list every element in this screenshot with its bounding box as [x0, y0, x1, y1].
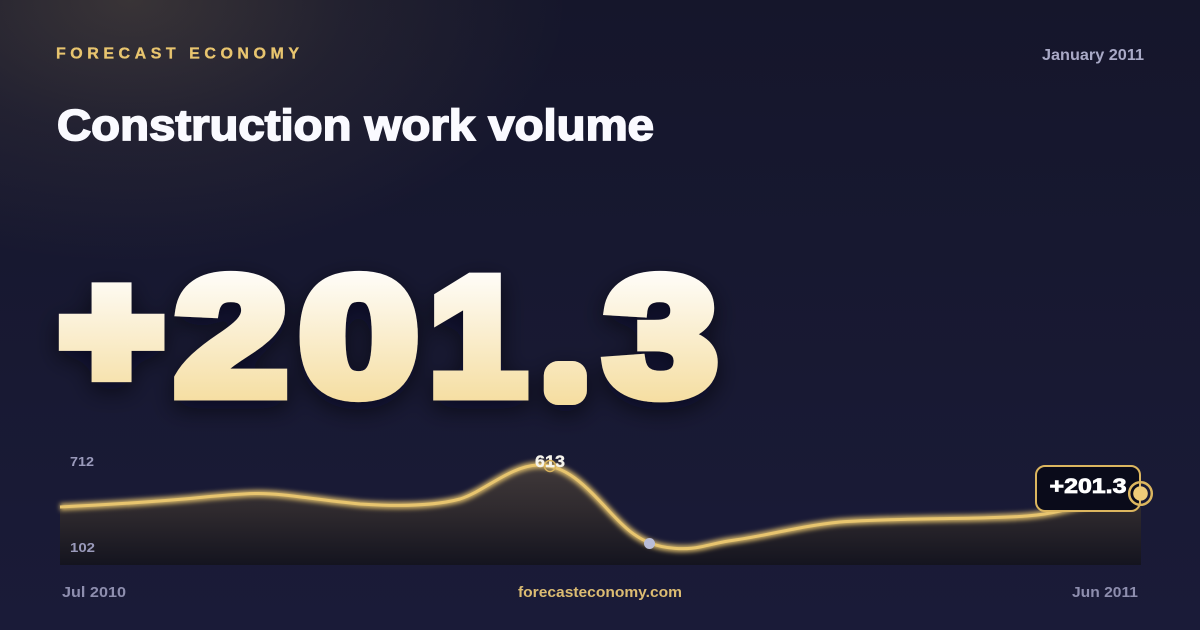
x axis label: end: Jun 2011	[1072, 584, 1138, 601]
axis label: max: 712	[70, 454, 94, 469]
x axis label: start: Jul 2010	[62, 584, 126, 601]
end callout	[1036, 466, 1140, 511]
chart area fill	[60, 465, 1141, 565]
low marker	[644, 538, 655, 549]
end callout: +201.3	[1050, 475, 1126, 498]
axis label: min: 102	[70, 540, 95, 555]
big number: 2	[175, 244, 287, 430]
big number: 0	[299, 243, 418, 430]
big number: .	[552, 300, 579, 412]
chart: construction work volume line	[60, 465, 1141, 565]
big number: +	[62, 244, 161, 418]
big number: 3	[605, 244, 717, 430]
title: Construction work volume	[57, 101, 654, 150]
big number: 1	[429, 244, 527, 430]
eyebrow: publisher name: FORECAST ECONOMY	[56, 46, 299, 62]
chart line	[60, 465, 1140, 549]
peak label: 613	[535, 452, 565, 471]
end marker	[1129, 482, 1152, 505]
date: January 2011	[1042, 47, 1144, 64]
chart line glow	[60, 465, 1140, 549]
big number	[62, 243, 717, 430]
peak marker	[544, 460, 556, 472]
source url: forecasteconomy.com	[518, 584, 682, 601]
